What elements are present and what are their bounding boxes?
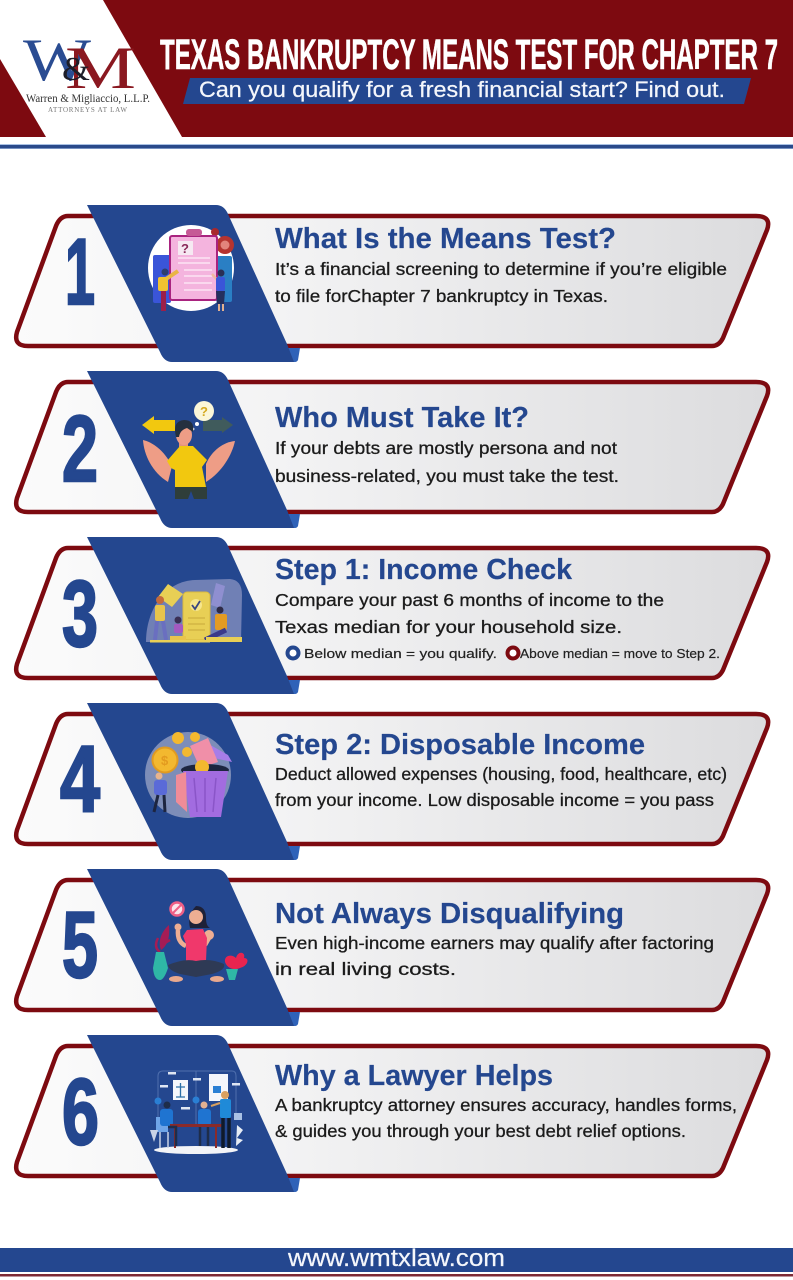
body text [275, 1095, 737, 1141]
footer bar: www.wmtxlaw.com [287, 1245, 505, 1272]
number 1: 1 [65, 219, 95, 324]
body text [275, 764, 727, 810]
icon: coins and trash can: $ [161, 753, 169, 768]
panel: step 6 why a lawyer helps [16, 1035, 768, 1192]
logo: Warren & Migliaccio: ATTORNEYS AT LAW [48, 106, 127, 114]
number 4: 4 [60, 726, 100, 831]
icon: clipboard checklist: ? [181, 241, 189, 256]
bullet: below median: Below median = you qualify. [304, 646, 497, 661]
heading: Why a Lawyer Helps [275, 1060, 553, 1092]
panel: step 2 who must take it [16, 371, 768, 528]
number 5: 5 [62, 892, 98, 997]
panel: step 3 income check [16, 537, 768, 694]
icon: confused person with arrows: ? [200, 404, 208, 419]
body text: from your income. Low disposable income = you pass [275, 790, 714, 810]
body text [275, 259, 727, 306]
number 6: 6 [62, 1059, 99, 1164]
body text: to file forChapter 7 bankruptcy in Texas. [275, 286, 608, 306]
body text: Compare your past 6 months of income to the [275, 590, 664, 610]
logo: Warren & Migliaccio: & [62, 51, 90, 88]
logo: Warren & Migliaccio: Warren & Migliaccio, L.L.P. [26, 93, 150, 105]
heading: Step 1: Income Check [275, 554, 573, 586]
icon: income check phone and people [146, 579, 242, 642]
heading: Who Must Take It? [275, 402, 529, 434]
heading: Step 2: Disposable Income [275, 729, 645, 761]
panel: step 5 not always disqualifying [16, 869, 768, 1026]
body text: Even high-income earners may qualify after factoring [275, 933, 714, 953]
heading: Not Always Disqualifying [275, 898, 624, 930]
body text: Deduct allowed expenses (housing, food, healthcare, etc) [275, 764, 727, 784]
body text [275, 438, 619, 486]
body text: It’s a financial screening to determine if you’re eligible [275, 259, 727, 279]
body text: business-related, you must take the test. [275, 466, 619, 486]
icon: woman with stop gesture and plants [153, 902, 247, 982]
icon: clipboard checklist [148, 225, 234, 311]
icon: confused person with arrows [142, 401, 235, 499]
footer bar [0, 1245, 793, 1276]
body text [275, 933, 714, 979]
body text: & guides you through your best debt relief options. [275, 1121, 686, 1141]
number 3: 3 [62, 561, 98, 666]
bullet: above median: Above median = move to Step 2. [520, 646, 720, 661]
heading: What Is the Means Test? [275, 223, 616, 255]
panel: step 4 disposable income [16, 703, 768, 860]
icon: coins and trash can [145, 732, 232, 818]
body text [275, 590, 664, 637]
logo: Warren & Migliaccio [23, 27, 150, 114]
body text: Texas median for your household size. [275, 617, 622, 637]
panel: step 1 what is the means test [16, 205, 768, 362]
body text: If your debts are mostly persona and not [275, 438, 617, 458]
subtitle ribbon: Can you qualify for a fresh financial start? Find out. [199, 77, 725, 102]
body text: in real living costs. [275, 959, 456, 979]
body text: A bankruptcy attorney ensures accuracy, handles forms, [275, 1095, 737, 1115]
number 2: 2 [62, 396, 98, 501]
icon: legal team meeting [150, 1071, 243, 1154]
logo: Warren & Migliaccio: W [23, 27, 91, 93]
logo: Warren & Migliaccio: M [65, 35, 136, 101]
header banner [0, 0, 793, 149]
